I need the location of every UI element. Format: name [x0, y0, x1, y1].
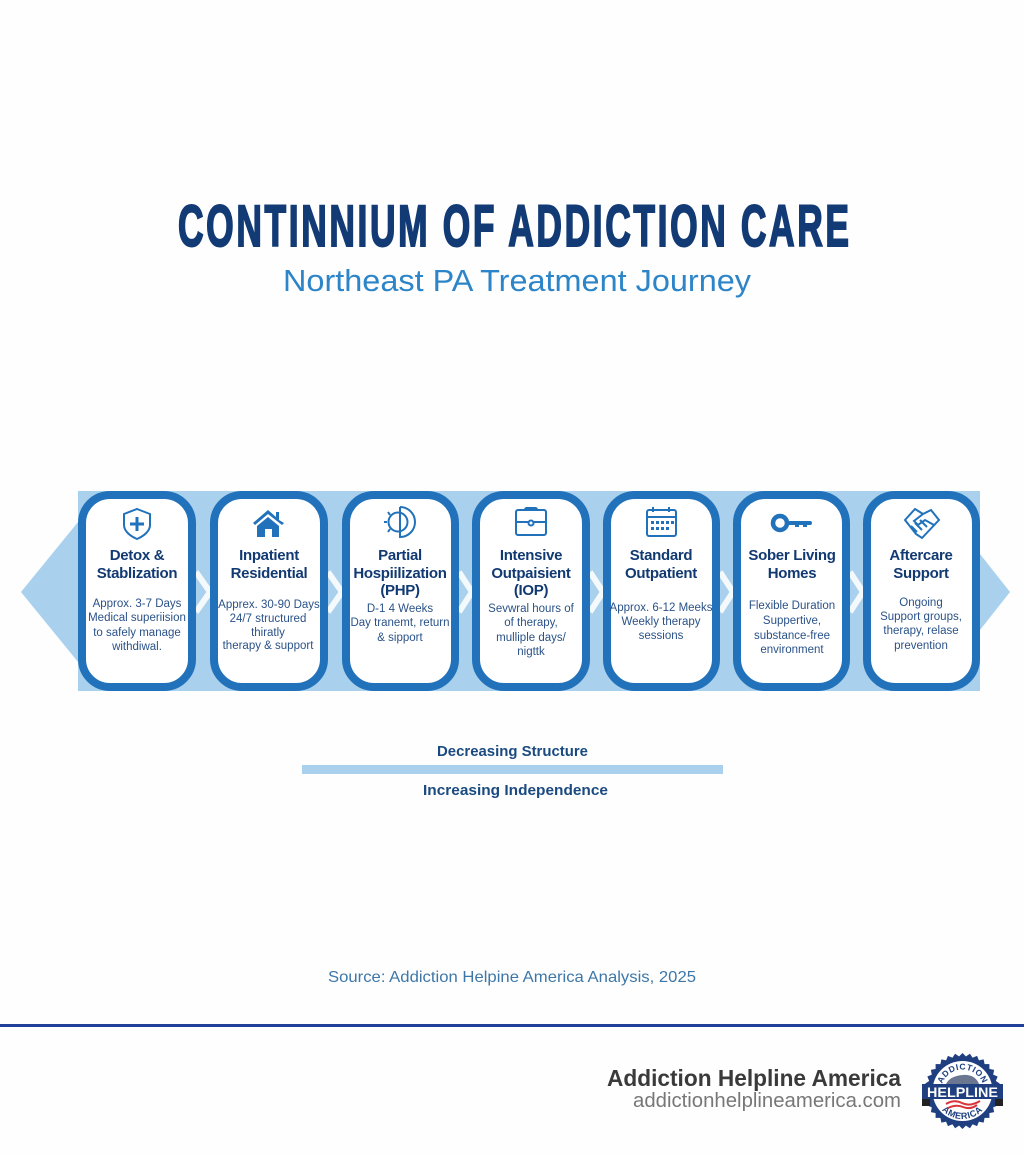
logo badge: AMERICA: [942, 1107, 982, 1120]
text: sober details: Suppertive,: [763, 615, 821, 627]
icon: shield: [124, 509, 150, 539]
text: standard details: sessions: [639, 630, 684, 642]
panel: detox and stabilization: [82, 495, 192, 687]
icon: calendar: [647, 507, 676, 536]
heading: inpatient: Residential: [231, 565, 307, 582]
logo badge: [922, 1053, 1003, 1129]
icon: house: [253, 510, 284, 537]
subtitle: Northeast PA Treatment Journey: [283, 263, 752, 298]
heading: standard outpatient: Standard: [630, 547, 692, 564]
text: sober details: substance-free: [754, 630, 830, 642]
text: intensive details: mulliple days/: [496, 632, 567, 644]
heading: aftercare: Aftercare: [889, 547, 953, 564]
scale bar: [302, 765, 723, 774]
panel: intensive outpatient: [476, 495, 586, 687]
footer brand name: Addiction Helpline America: [607, 1065, 901, 1091]
text: aftercare details: therapy, relase: [883, 625, 959, 637]
text: detox details: to safely manage: [93, 627, 181, 639]
panel: inpatient residential: [214, 495, 324, 687]
text: inpatient details: 24/7 structured: [230, 613, 306, 625]
text: intensive details: nigttk: [517, 646, 545, 658]
panel: sober living: [737, 495, 846, 687]
icon: handshake: [905, 509, 939, 538]
heading: partial hospitalization: (PHP): [380, 582, 420, 599]
title: CONTINNIUM OF ADDICTION CARE: [178, 195, 849, 259]
heading: detox: Detox &: [110, 547, 165, 564]
heading: intensive outpatient: Intensive: [500, 547, 562, 564]
heading: inpatient: Inpatient: [239, 547, 299, 564]
text: partial details: Day tranemt, return: [350, 617, 450, 629]
heading: partial hospitalization: Partial: [378, 547, 422, 564]
panel: standard outpatient: [607, 495, 716, 687]
text: aftercare details: prevention: [894, 640, 948, 652]
text: sober details: environment: [760, 644, 824, 656]
text: detox details: withdiwal.: [111, 641, 162, 653]
footer url: addictionhelplineamerica.com: [633, 1090, 901, 1112]
text: inpatient details: therapy & support: [223, 640, 314, 652]
heading: intensive outpatient: Outpaisient: [491, 565, 571, 582]
heading: partial hospitalization: Hospiilization: [353, 565, 447, 582]
text: sober details: Flexible Duration: [749, 600, 835, 612]
footer divider: [0, 1024, 1024, 1027]
text: intensive details: of therapy,: [504, 617, 558, 629]
text: standard details: Approx. 6-12 Meeks: [610, 602, 713, 614]
logo badge: ADDICTION: [938, 1064, 988, 1084]
icon: partial circle: [384, 507, 415, 537]
text: partial details: D-1 4 Weeks: [367, 603, 433, 615]
heading: detox: Stablization: [97, 565, 177, 582]
text: standard details: Weekly therapy: [621, 616, 701, 628]
continuum arrow band: [21, 491, 1010, 691]
panel: aftercare support: [867, 495, 976, 687]
heading: aftercare: Support: [893, 565, 949, 582]
heading: sober living: Homes: [768, 565, 816, 582]
text: inpatient details: thiratly: [251, 627, 285, 639]
text: aftercare details: Ongoing: [899, 597, 943, 609]
text: partial details: & sipport: [377, 632, 423, 644]
text: detox details: Approx. 3-7 Days: [93, 598, 182, 610]
text: aftercare details: Support groups,: [880, 611, 962, 623]
label: increasing independence: Increasing Independence: [423, 782, 608, 799]
heading: intensive outpatient: (IOP): [514, 582, 548, 599]
source note: Source: Addiction Helpine America Analysis, 2025: [328, 969, 696, 986]
heading: sober living: Sober Living: [748, 547, 836, 564]
text: inpatient details: Apprex. 30-90 Days: [218, 599, 320, 611]
text: detox details: Medical superiision: [88, 612, 186, 624]
heading: standard outpatient: Outpatient: [625, 565, 697, 582]
icon: key: [773, 516, 812, 530]
panel: partial hospitalization: [346, 495, 455, 687]
label: decreasing structure: Decreasing Structure: [437, 743, 588, 760]
icon: briefcase: [516, 508, 546, 535]
text: intensive details: Sevwral hours of: [488, 603, 575, 615]
logo badge: HELPLINE: [927, 1084, 998, 1100]
